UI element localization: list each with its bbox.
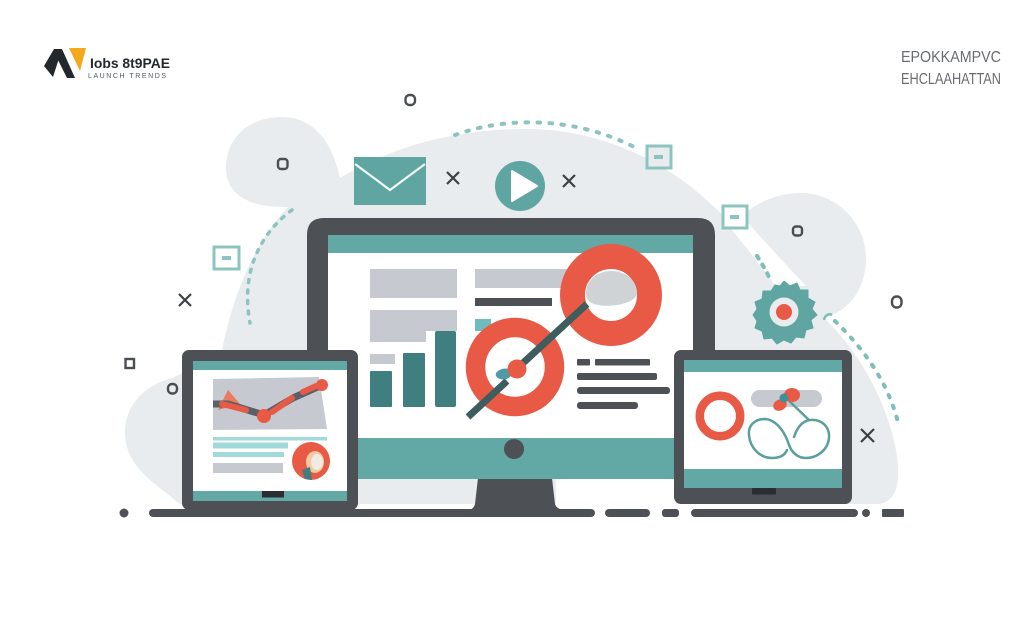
bar chart <box>370 331 456 407</box>
background cloud shape <box>125 117 898 504</box>
right tablet header <box>684 360 842 372</box>
icon: play button <box>495 161 545 211</box>
teal loops <box>749 419 829 458</box>
icons: small rings <box>126 95 902 394</box>
dotted arc: top <box>455 122 638 149</box>
grey blob in upper ring <box>586 271 637 306</box>
left tablet header <box>193 361 347 370</box>
base line <box>120 508 904 518</box>
text lines <box>577 359 670 409</box>
icons: cross marks <box>179 172 874 442</box>
connector stalk <box>784 396 809 420</box>
small teal arc next to gear <box>824 314 832 320</box>
red node <box>771 388 800 413</box>
dotted arc: right <box>835 321 899 427</box>
red badge <box>292 442 330 480</box>
grey pill <box>751 390 822 407</box>
icon: square top right <box>647 146 671 168</box>
right tablet screen <box>684 360 842 488</box>
teal text lines <box>213 437 327 457</box>
icon: square right <box>723 206 747 228</box>
grey blocks <box>370 269 570 364</box>
white floor right of stand <box>556 479 676 509</box>
dotted arc: left <box>248 210 292 323</box>
monitor <box>307 218 715 510</box>
icon: gear <box>753 281 817 344</box>
screen header <box>328 235 693 253</box>
dark heading bar <box>475 298 552 306</box>
monitor bezel <box>307 218 715 360</box>
left tablet footer <box>193 491 347 501</box>
logo mark <box>44 48 86 78</box>
screen footer band <box>340 438 680 479</box>
dotted arc: gear <box>757 256 769 277</box>
power button <box>504 439 524 459</box>
left tablet screen <box>193 361 347 501</box>
right tablet button <box>752 488 776 494</box>
small teal block <box>475 319 491 331</box>
right tablet body <box>674 350 852 504</box>
teal joint <box>496 369 512 380</box>
grey block <box>213 463 283 473</box>
logo tagline: LAUNCH TRENDS <box>88 73 166 80</box>
top-right caption: EHCLAAHATTAN <box>901 71 1001 88</box>
monitor stand <box>470 478 566 510</box>
line chart <box>213 377 328 430</box>
logo <box>44 48 170 80</box>
upper red ring <box>572 256 650 334</box>
connector line <box>468 304 587 417</box>
left tablet <box>182 350 358 510</box>
lower red ring <box>476 328 554 406</box>
red node <box>508 360 526 378</box>
icon: square left <box>214 247 239 269</box>
white gap between cloud and right circle <box>730 222 806 286</box>
left tablet body <box>182 350 358 510</box>
left tablet button <box>262 491 284 498</box>
top-right caption <box>901 49 1001 88</box>
icon: envelope <box>354 157 426 205</box>
top-right caption: EPOKKAMPVC <box>901 49 1001 66</box>
logo name: Iobs 8t9PAE <box>90 55 170 71</box>
right tablet <box>674 350 852 504</box>
right tablet footer <box>684 469 842 488</box>
red ring <box>700 396 740 436</box>
monitor screen <box>328 235 693 365</box>
